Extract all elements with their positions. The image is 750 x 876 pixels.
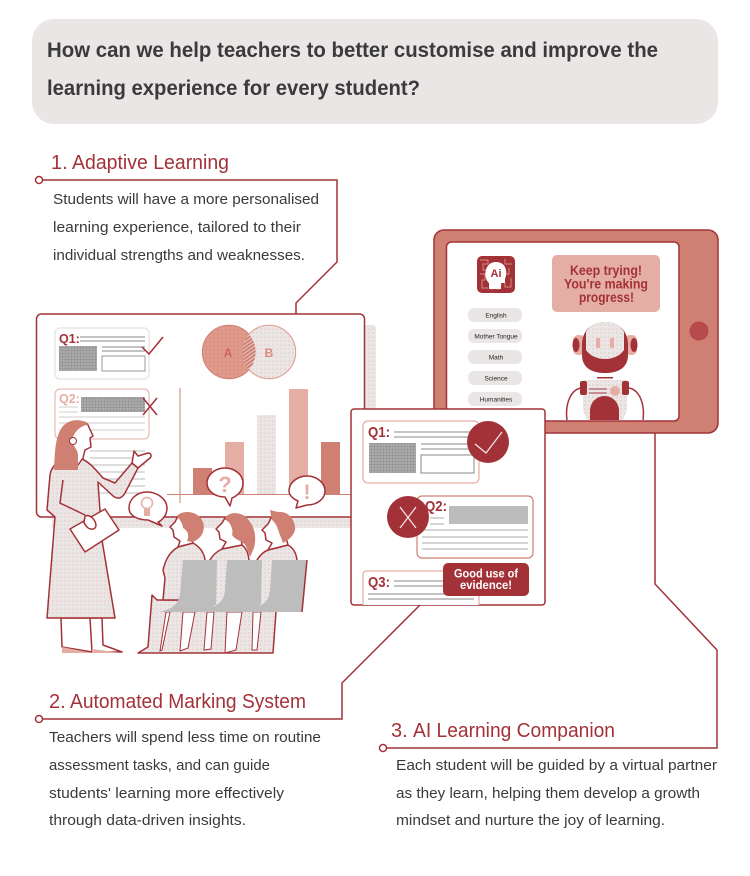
subject menu: Humanities (480, 396, 513, 404)
robot ears (573, 335, 585, 355)
teacher holding hand (84, 516, 96, 529)
bubble: question mark (207, 468, 243, 506)
subject menu: Science (484, 376, 508, 382)
bar chart (167, 388, 351, 503)
feedback badge: Good use of (454, 566, 519, 580)
bubble: light bulb (129, 492, 167, 526)
illustration: teacher (47, 420, 151, 653)
teacher hair (54, 420, 88, 470)
section 1: adaptive learning text: Adaptive Learning (72, 152, 229, 174)
bubble: exclamation mark (289, 476, 325, 508)
student 2 torso (210, 545, 249, 600)
subject menu: Mother Tongue (474, 334, 518, 340)
marking question 3 (363, 571, 479, 605)
bubble: exclamation mark: ! (304, 481, 310, 504)
speech box: encouragement (552, 255, 660, 312)
teacher hand (132, 451, 151, 468)
clipboard (70, 509, 119, 552)
tablet button (690, 322, 708, 340)
section 1: adaptive learning text: individual strengths and weaknesses. (53, 248, 305, 264)
section 3: AI companion text: AI Learning Companion (413, 720, 615, 742)
student hair (177, 510, 295, 557)
marking question 2: Q2: (425, 498, 447, 515)
student legs (138, 595, 276, 653)
chairs (158, 560, 307, 612)
board quiz question 3 lines (90, 451, 145, 493)
venn diagram: A (224, 346, 233, 360)
title banner: How can we help teachers to better customise and improve the (47, 39, 658, 62)
icon: cross mark (387, 496, 429, 538)
section 2: automated marking text: students' learning more effectively (49, 786, 285, 802)
section 3: AI companion text (391, 720, 717, 829)
section 2: automated marking text: Automated Marking System (70, 691, 306, 713)
section 2: automated marking text: Teachers will spend less time on routine (49, 730, 321, 746)
feedback badge: evidence! (460, 578, 512, 592)
student 1 torso (163, 543, 205, 600)
section 3: AI companion text: Each student will be guided by a virtual partner (396, 758, 717, 774)
illustration: students (129, 468, 325, 653)
marking question 3: Q3: (368, 574, 390, 591)
panel: tablet with AI companion (434, 230, 718, 433)
feedback badge (443, 563, 529, 596)
tablet screen (446, 242, 679, 421)
robot body (583, 380, 627, 420)
icon: AI head: Ai (490, 268, 502, 280)
robot head (582, 322, 628, 373)
chair outline (302, 560, 307, 612)
title banner: learning experience for every student? (47, 77, 420, 100)
marking question 1 (363, 421, 479, 483)
connector: adaptive learning to board (36, 176, 337, 314)
teacher legs (61, 618, 122, 652)
section 2: automated marking text (49, 691, 321, 829)
teacher arm line (60, 480, 85, 515)
board quiz question 2: Q2: (59, 392, 80, 406)
speech box: encouragement: You're making (564, 276, 648, 292)
speech box: encouragement: Keep trying! (570, 262, 642, 278)
panel: automated marking card (351, 409, 545, 605)
subject menu: English (485, 312, 507, 320)
section 1: adaptive learning text (51, 152, 319, 264)
robot arms (567, 388, 643, 420)
icon: AI head (477, 256, 515, 293)
student 3 torso (257, 545, 297, 600)
board quiz question 1 (55, 328, 163, 379)
icon: check mark (467, 421, 509, 463)
subject menu: Math (489, 354, 504, 362)
section 1: adaptive learning text: Students will have a more personalised (53, 192, 319, 208)
robot eyes (596, 338, 600, 348)
robot (567, 322, 643, 420)
subject menu (468, 308, 522, 406)
marking question 1: Q1: (368, 424, 390, 441)
section 3: AI companion text: as they learn, helping them develop a growth (396, 786, 700, 802)
section 1: adaptive learning text: learning experience, tailored to their (53, 220, 301, 236)
bubble: question mark: ? (218, 472, 232, 497)
board quiz question 2 (55, 389, 157, 439)
student faces (170, 516, 288, 550)
speech box: encouragement: progress! (579, 289, 634, 305)
marking question 2 (417, 496, 533, 558)
connector: AI companion (380, 433, 717, 752)
teacher face (70, 422, 93, 465)
teacher ear (70, 438, 76, 444)
connector: automated marking (36, 605, 420, 722)
venn diagram (202, 325, 296, 379)
section 3: AI companion text: 3. (391, 720, 408, 742)
title banner (32, 19, 718, 124)
chair gaps showing torsos (213, 560, 272, 606)
teacher dress (47, 458, 138, 618)
panel: presentation board (36, 314, 376, 528)
section 3: AI companion text: mindset and nurture the joy of learning. (396, 813, 665, 829)
section 2: automated marking text: 2. (49, 691, 66, 713)
section 2: automated marking text: assessment tasks, and can guide (49, 758, 270, 774)
section 2: automated marking text: through data-driven insights. (49, 813, 246, 829)
board quiz question 1: Q1: (59, 332, 80, 346)
robot neck (597, 377, 613, 378)
section 1: adaptive learning text: 1. (51, 152, 68, 174)
venn diagram: B (265, 346, 274, 360)
